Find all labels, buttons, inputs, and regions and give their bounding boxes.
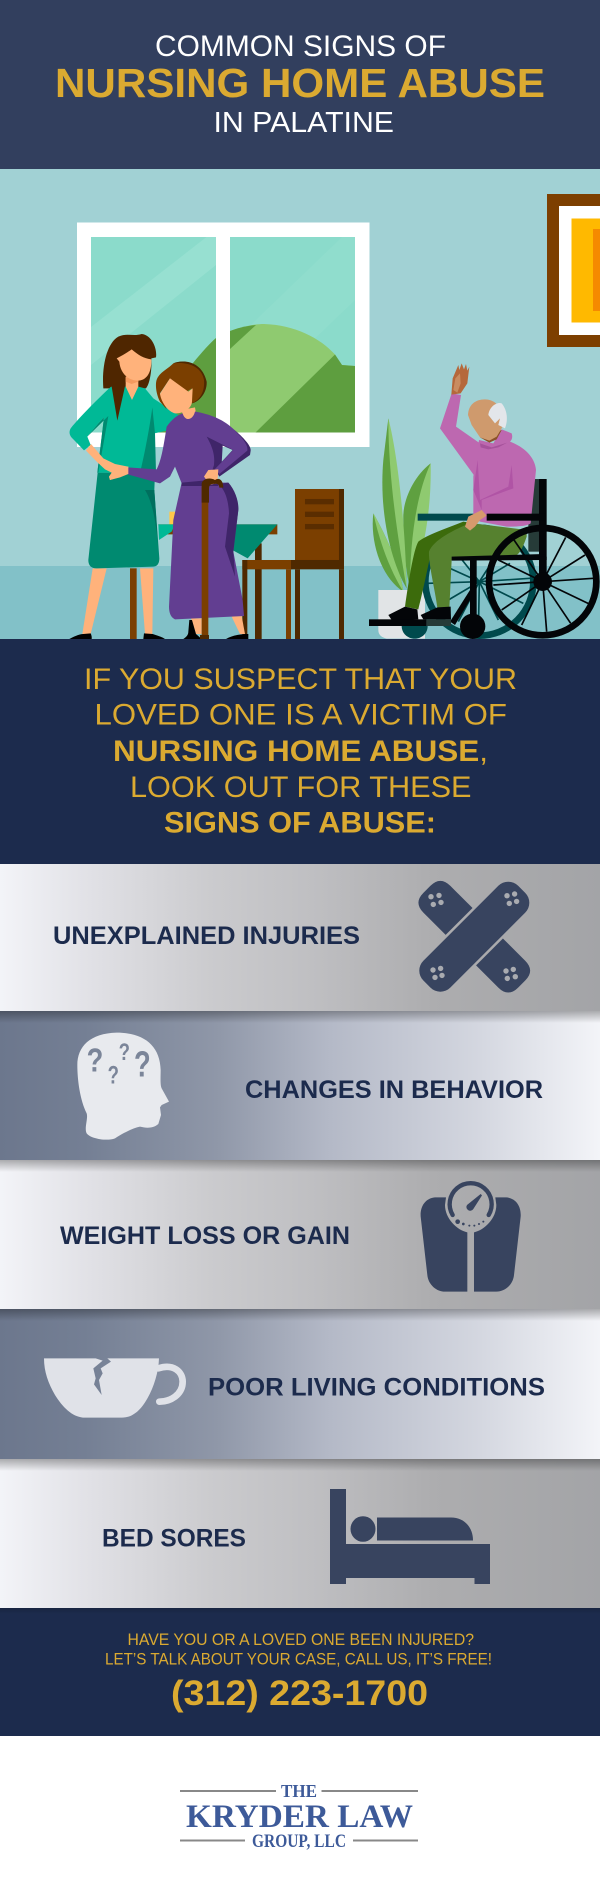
icon: cracked cup <box>44 1358 183 1418</box>
sign 5: bed sores <box>0 1459 600 1608</box>
sign 1: unexplained injuries <box>0 864 600 1011</box>
floor <box>0 566 600 640</box>
wheelchair front frame and big wheel <box>369 514 596 639</box>
icon: head with question marks: ? <box>119 1040 130 1066</box>
wheelchair rear frame and wheel <box>402 479 547 639</box>
wall <box>0 169 600 640</box>
plant and man in wheelchair <box>369 363 596 639</box>
table and chair <box>130 489 344 639</box>
call text: LET’S TALK ABOUT YOUR CASE, CALL US, IT’S FREE! <box>105 1650 492 1668</box>
figure: elderly woman with cane <box>128 362 251 639</box>
hands clasped <box>109 467 128 480</box>
plant <box>373 418 431 639</box>
intro line 5: SIGNS OF ABUSE: <box>164 806 436 840</box>
intro line 4: LOOK OUT FOR THESE <box>130 771 472 804</box>
window <box>77 222 370 447</box>
phone number: (312) 223-1700 <box>171 1674 428 1713</box>
women, table and chair <box>69 334 344 639</box>
question text: HAVE YOU OR A LOVED ONE BEEN INJURED? <box>128 1630 474 1649</box>
intro panel <box>0 639 600 864</box>
intro line 2: LOVED ONE IS A VICTIM OF <box>94 698 507 732</box>
icon: head with question marks: ? <box>134 1045 151 1085</box>
sign 1: unexplained injuries: UNEXPLAINED INJURIES <box>53 922 360 950</box>
title line: in Palatine: IN PALATINE <box>214 107 394 139</box>
logo: The Kryder Law Group, LLC <box>0 1736 600 1895</box>
sign 4: poor living conditions <box>0 1309 600 1459</box>
figure: elderly man <box>388 363 536 620</box>
logo: The Kryder Law Group, LLC: GROUP, LLC <box>252 1831 346 1852</box>
logo: The Kryder Law Group, LLC: THE <box>281 1781 317 1801</box>
intro line 1: IF YOU SUSPECT THAT YOUR <box>84 663 517 696</box>
sign 3: weight loss or gain <box>0 1160 600 1310</box>
sign 4: poor living conditions: POOR LIVING CONDITIONS <box>208 1374 545 1402</box>
icon: head with question marks: ? <box>108 1061 119 1089</box>
icon: head with question marks: ? <box>87 1043 103 1080</box>
icon: crossed bandages <box>413 876 535 998</box>
illustration: nursing home room <box>0 169 600 640</box>
title line: nursing home abuse: NURSING HOME ABUSE <box>55 60 545 106</box>
header panel <box>0 0 600 169</box>
intro line 3: NURSING HOME ABUSE , <box>113 735 488 768</box>
call to action panel <box>0 1608 600 1736</box>
sign 2: changes in behavior: CHANGES IN BEHAVIOR <box>245 1076 543 1104</box>
picture frame <box>547 194 600 347</box>
title line: common signs of: COMMON SIGNS OF <box>155 30 446 63</box>
sign 5: bed sores: BED SORES <box>102 1524 246 1552</box>
figure: caregiver <box>69 334 178 639</box>
icon: head with question marks <box>77 1033 169 1140</box>
sign 3: weight loss or gain: WEIGHT LOSS OR GAIN <box>60 1222 350 1250</box>
sign 2: changes in behavior <box>0 1011 600 1160</box>
logo: The Kryder Law Group, LLC: KRYDER LAW <box>186 1799 413 1835</box>
icon: bathroom scale <box>421 1183 521 1292</box>
icon: person in bed <box>330 1489 490 1584</box>
